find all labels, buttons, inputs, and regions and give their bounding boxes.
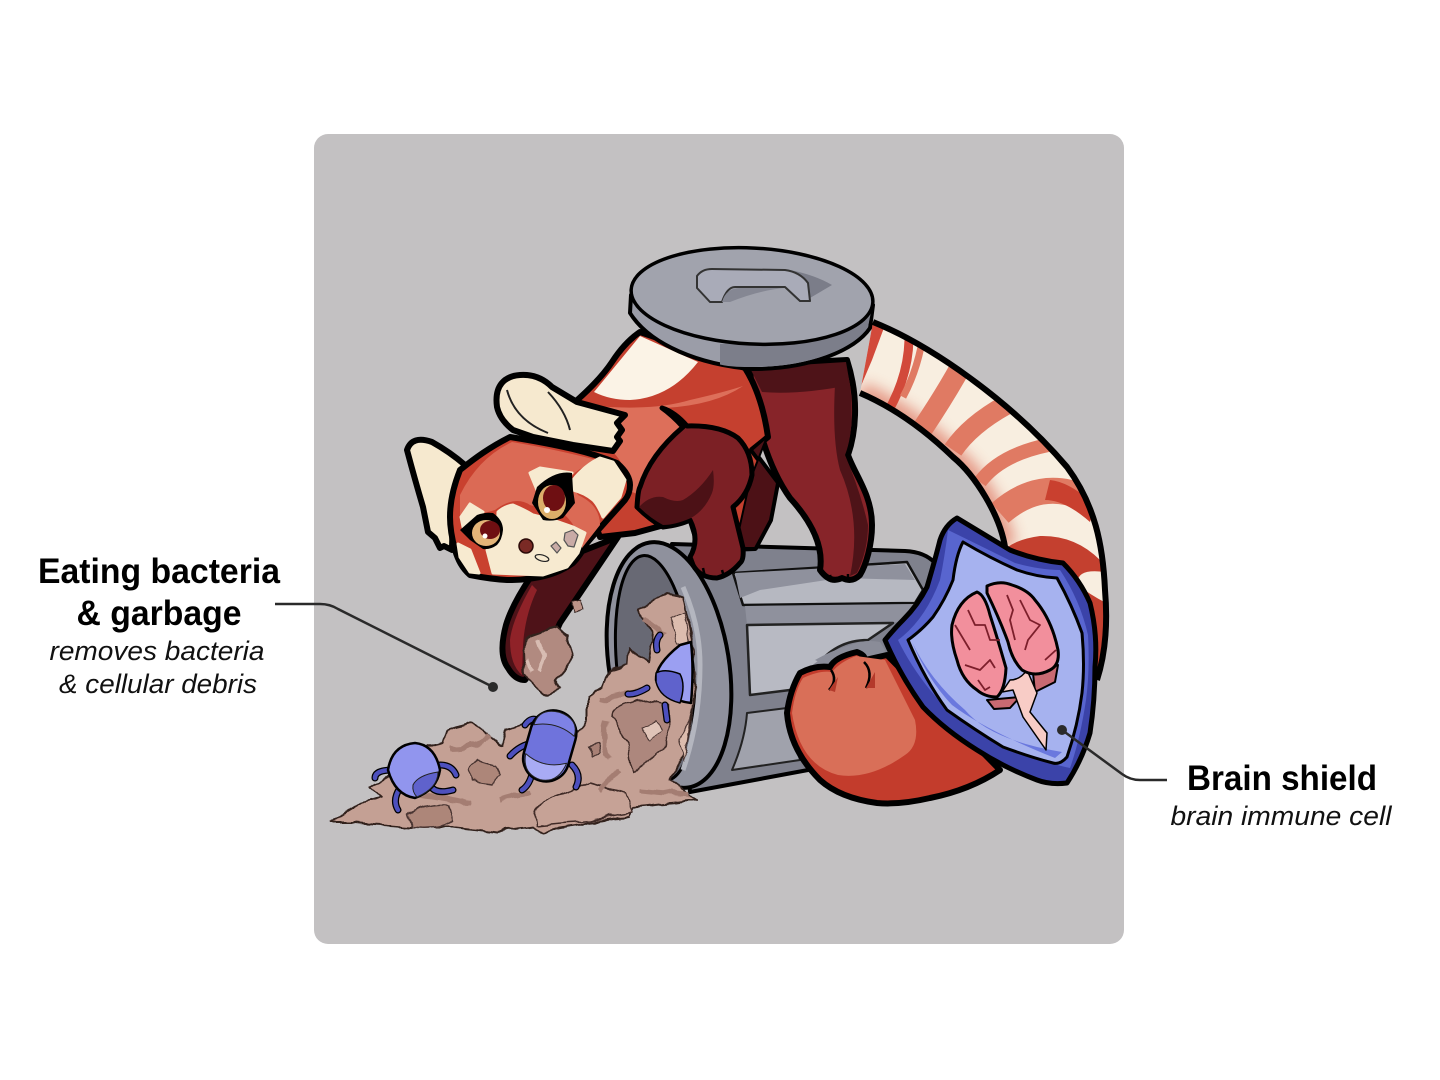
infographic canvas [40, 134, 1392, 944]
brain icon [952, 583, 1058, 750]
label: brain shield [1170, 759, 1393, 831]
panel: grey illustration background [314, 134, 1124, 944]
panda back ear [497, 375, 625, 451]
label: eating bacteria and garbage: removes bacteria [50, 636, 264, 666]
panda front leg [637, 408, 752, 578]
face cream markings [458, 458, 625, 575]
panda hind leg [750, 360, 872, 582]
panda front foot (red paw) [787, 642, 1000, 803]
label: eating bacteria and garbage: & cellular debris [59, 669, 257, 699]
trash can lid [629, 242, 875, 369]
label: eating bacteria and garbage: & garbage [76, 594, 242, 633]
panda reaching arm [502, 537, 618, 680]
red panda tail [858, 319, 1110, 681]
debris on cheek [564, 530, 578, 547]
panda front ear [407, 440, 465, 550]
eye: left [460, 513, 503, 549]
eye: right [532, 473, 575, 521]
label: eating bacteria and garbage [38, 552, 281, 699]
label: eating bacteria and garbage: Eating bacteria [38, 552, 281, 591]
bacterium: inside can [628, 635, 692, 720]
callout: brain shield leader line [1057, 725, 1167, 780]
bacterium: middle [510, 705, 582, 790]
nose and mouth [519, 539, 533, 553]
label: brain shield: Brain shield [1187, 759, 1377, 798]
brain shield [885, 518, 1096, 784]
panda head [450, 437, 630, 580]
callout: eating bacteria leader line [275, 604, 498, 692]
debris pile [330, 593, 697, 832]
panda torso [575, 332, 777, 550]
debris clump in paw [522, 600, 583, 695]
trash can [590, 533, 948, 797]
label: brain shield: brain immune cell [1170, 801, 1393, 831]
bacterium: left [375, 743, 456, 810]
